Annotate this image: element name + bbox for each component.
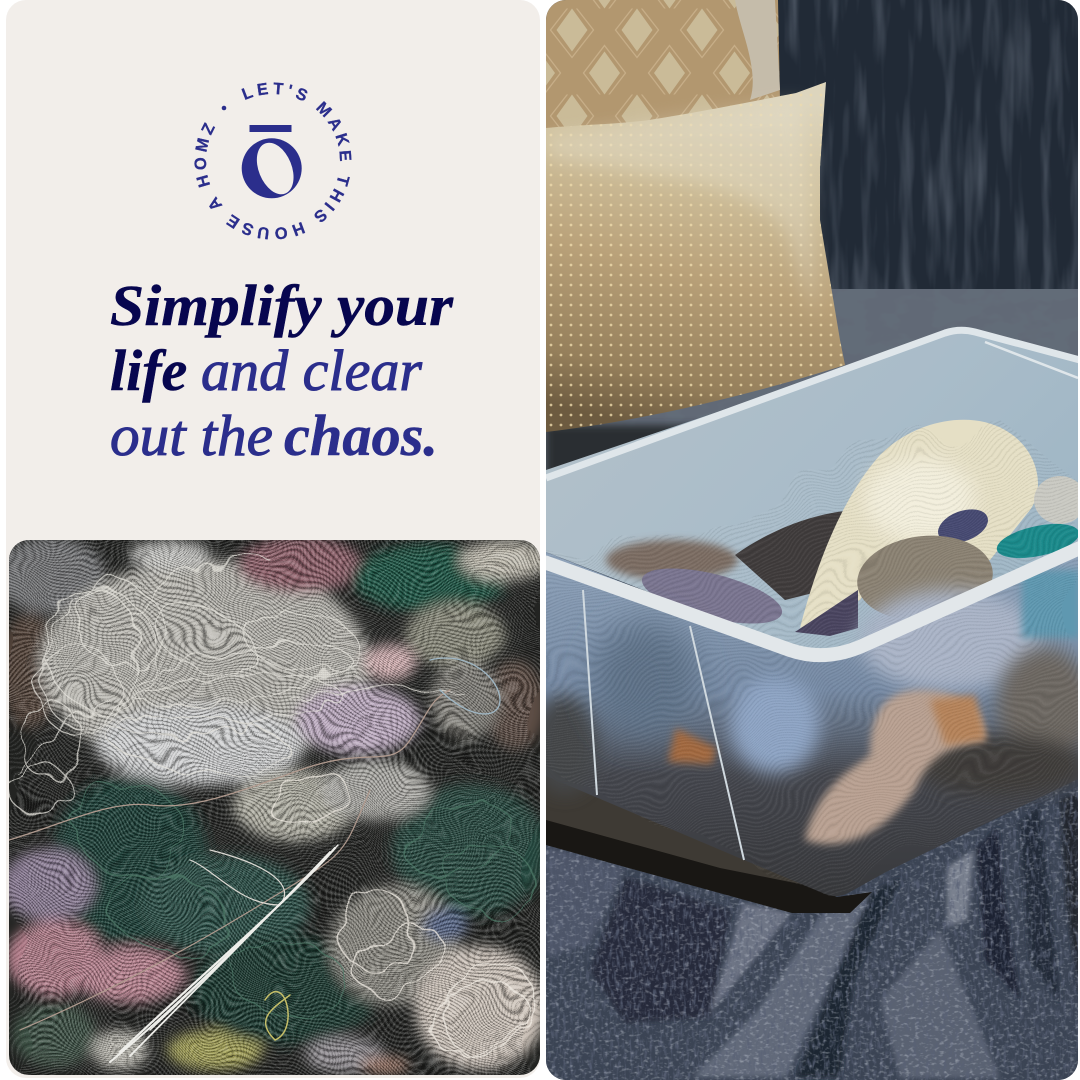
blue-grey yarn right: [860, 590, 1040, 690]
off-white loops: [10, 559, 460, 816]
box seams: [583, 590, 744, 860]
orange yarn left: [668, 728, 716, 764]
heading: out the: [110, 403, 273, 468]
logo ring dot: [222, 106, 226, 110]
teal-blue reflection: [1022, 570, 1080, 638]
box front wall: [546, 540, 1080, 896]
yarn inside box: [606, 420, 1080, 636]
fine strand texture: crossing direction: [9, 505, 540, 1080]
orange yarn: [930, 695, 986, 745]
dark purple band: [795, 590, 858, 636]
cream yarn ball: [800, 420, 1038, 628]
green strands: [62, 768, 541, 1026]
dark grey yarn: [735, 511, 845, 600]
blue middle: [730, 677, 820, 773]
long loose threads: [9, 658, 500, 1040]
blue-grey floor: [546, 775, 1080, 1080]
yarn surface texture in box: [546, 420, 1078, 897]
sofa seat: [546, 289, 1078, 470]
purple multicolour yarn: [642, 568, 782, 624]
dark purple knob: [938, 509, 988, 542]
logo letter o: [242, 137, 302, 200]
heading: life: [110, 338, 187, 403]
logo: circular badge: [194, 82, 352, 240]
box back rim: [546, 330, 1080, 478]
heading: Simplify your: [110, 273, 453, 338]
patterned pillow: [546, 0, 780, 140]
logo ring text: LET'S MAKE THIS HOUSE A HOMZ: [194, 82, 352, 240]
grey-brown fuzzy yarn: [606, 540, 738, 580]
fine strand texture: main direction: [9, 505, 540, 1080]
pale tan yarn: [805, 690, 985, 844]
white yarn on right: [1034, 476, 1080, 524]
blue yarn left: [593, 622, 697, 738]
box back wall: [546, 330, 1080, 655]
panel: cream text card: [6, 0, 540, 1078]
beaded beige pillow: [546, 82, 845, 432]
dark tray under box: [546, 776, 872, 913]
yarn seen through box: [531, 570, 1080, 844]
grey yarn ball: [857, 536, 993, 616]
dark sofa back: [770, 0, 1080, 290]
loose strands: [10, 559, 553, 1074]
dark yarn lower right: [915, 735, 1080, 795]
photo: tangled thread pile: [9, 540, 540, 1075]
teal yarn: [996, 524, 1078, 558]
logo bar: [250, 125, 292, 132]
storage box: [531, 330, 1080, 897]
box front rim: [544, 547, 1080, 655]
white bundle of strands: [110, 845, 338, 1062]
thread colour masses: [0, 537, 550, 1073]
grey yarn right: [997, 647, 1080, 763]
inner rim highlight: [985, 342, 1078, 378]
pale bottom right strands: [264, 764, 553, 1074]
dark shadow left: [531, 695, 599, 795]
heading: chaos.: [284, 403, 438, 468]
photo: yarn in clear storage box on sofa: [531, 0, 1080, 1080]
heading: and clear: [201, 338, 422, 403]
floor light and dark swaths: [546, 790, 1080, 1078]
